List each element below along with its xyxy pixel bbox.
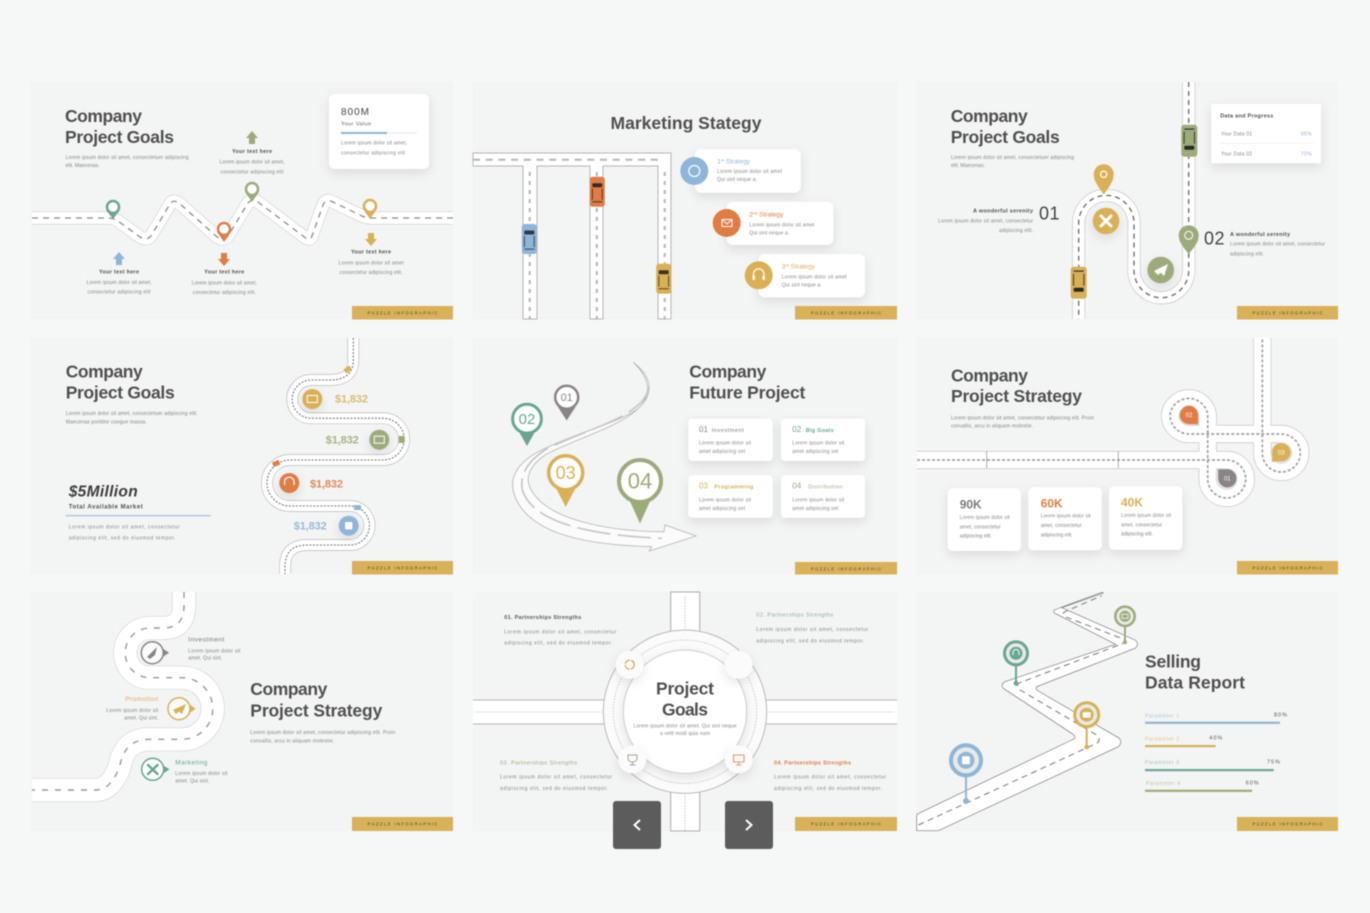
text block 03	[500, 760, 612, 792]
mini car: olive	[399, 436, 405, 443]
bar chart: Parameter 4	[1146, 781, 1180, 787]
intro text	[951, 415, 1094, 430]
title	[689, 362, 805, 403]
text block 03: 03. Partnerships Strengths	[500, 760, 577, 766]
title: Future Project	[689, 383, 805, 403]
pin: olive	[1115, 607, 1135, 644]
text block 03: Lorem ipsum dolor sit amet, consectetur	[500, 775, 612, 781]
pin: olive	[245, 183, 259, 202]
data card: Your Data 02	[1221, 151, 1252, 157]
callout: gold down arrow: Lorem ipsum dolor sit amet	[338, 260, 404, 266]
item 01	[938, 203, 1060, 234]
title: Selling	[1145, 652, 1201, 672]
intro text: Lorem ipsum dolor sit amet, consectetur adipiscing elit. Proin	[250, 730, 396, 736]
intro text: convallis, arcu in aliquam molestie.	[250, 739, 334, 745]
card 02: amet adipiscing set	[792, 449, 839, 455]
intro text	[250, 730, 396, 745]
bar chart	[1145, 713, 1287, 792]
strategy card 2: nd	[753, 210, 757, 215]
strategy card 3: Lorem ipsum dolor sit amet	[782, 275, 847, 281]
node: monitor icon	[725, 745, 753, 773]
item: investment: Lorem ipsum dolor sit	[188, 648, 241, 654]
title: Company	[250, 679, 328, 699]
strategy card 1: 1	[717, 158, 721, 165]
stat card 60K	[1028, 487, 1102, 550]
text block 04: adipiscing elit, sed do eiusmod tempor.	[774, 786, 882, 792]
pin 04	[619, 460, 661, 524]
title: Company	[65, 106, 142, 126]
panel: company future project	[473, 338, 897, 574]
item 01: 01	[1039, 203, 1060, 223]
item: promotion: amet. Qui sint.	[124, 716, 158, 722]
title: Company	[689, 362, 767, 382]
item 02: 02	[1204, 228, 1224, 248]
button: next	[725, 801, 773, 849]
card 04: 04	[792, 482, 802, 491]
panel: company project goals serpentine road	[31, 338, 453, 574]
footer tag	[352, 306, 453, 320]
title	[656, 678, 714, 719]
card 03: Lorem ipsum dolor sit	[699, 497, 752, 503]
title: Goals	[662, 699, 708, 719]
value row: blue	[294, 516, 359, 536]
stat card 60K: 60K	[1041, 496, 1063, 510]
panel: company project goals zigzag road	[31, 82, 453, 320]
arrow road	[513, 362, 696, 551]
card 04: Lorem ipsum dolor sit	[792, 497, 845, 503]
strategy card 1: Strategy	[724, 158, 751, 165]
footer tag: PUZZLE INFOGRAPHIC	[1252, 822, 1322, 826]
panel: company project strategy looping road	[917, 338, 1338, 574]
footer tag: PUZZLE INFOGRAPHIC	[811, 310, 881, 316]
pin 01: 01	[561, 392, 573, 404]
pin: teal	[106, 201, 120, 219]
callout: olive up arrow: Lorem ipsum dolor sit amet,	[220, 160, 284, 166]
footer tag: PUZZLE INFOGRAPHIC	[1252, 310, 1322, 316]
intro text: Lorem ipsum dolor sit amet, consectetuer adipiscing elit.	[66, 411, 198, 417]
strategy card 3: Strategy	[789, 263, 816, 270]
pin: teal	[1004, 642, 1028, 686]
item: marketing	[175, 759, 228, 785]
value row: blue: $1,832	[294, 520, 327, 532]
title: Project Strategy	[951, 386, 1082, 406]
stat card 90K: 90K	[960, 497, 982, 511]
value card: Lorem ipsum dolor sit amet,	[341, 141, 407, 147]
title	[951, 366, 1082, 406]
bar chart: Parameter 3	[1145, 760, 1179, 766]
data card: 95%	[1301, 132, 1312, 138]
card 01: Investment	[712, 428, 744, 434]
strategy card 2: Lorem ipsum dolor sit amet	[749, 223, 815, 229]
footer tag	[352, 561, 453, 574]
intro text: Maecenas porttitor congue massa.	[66, 419, 147, 425]
strategy card 1	[680, 149, 801, 193]
card 03: amet adipiscing set	[699, 506, 746, 512]
zigzag perspective road	[917, 592, 1137, 831]
pin: orange	[217, 223, 231, 242]
footer tag	[795, 817, 897, 831]
callout: blue up arrow: consectetur adipiscing elit	[88, 290, 151, 296]
car: gold	[1071, 267, 1087, 299]
footer tag: PUZZLE INFOGRAPHIC	[368, 566, 438, 570]
node: blank	[725, 651, 753, 679]
text block 04: Lorem ipsum dolor sit amet, consectetur	[774, 775, 886, 781]
item 02	[1204, 228, 1325, 257]
callout: gold down arrow	[338, 233, 404, 276]
marker 03	[1272, 443, 1291, 462]
text block 03: adipiscing elit, sed do eiusmod tempor.	[500, 786, 608, 792]
panel: selling data report	[917, 592, 1338, 831]
text block 01: adipiscing elit, sed do eiusmod tempor.	[504, 641, 612, 647]
value row: orange: $1,832	[310, 478, 343, 490]
item 01: adipiscing elit.	[999, 228, 1033, 234]
title: Data Report	[1145, 673, 1245, 693]
card 03	[688, 475, 773, 518]
callout: blue up arrow: Lorem ipsum dolor sit amet,	[86, 280, 152, 286]
title	[250, 679, 383, 720]
footer tag	[1237, 561, 1338, 574]
icon: promotion plane	[168, 698, 196, 720]
stat card 90K: amet, consectetur	[960, 524, 1001, 530]
item: marketing: Lorem ipsum dolor sit	[175, 771, 228, 777]
marker 02	[1180, 406, 1198, 424]
marker 01: 01	[1224, 476, 1231, 482]
S road	[32, 592, 213, 790]
node: gold cycle icon	[616, 651, 644, 679]
intro text	[66, 411, 198, 425]
intro text	[66, 155, 189, 169]
pin 01	[555, 386, 578, 420]
stat card 40K: 40K	[1121, 496, 1143, 510]
market stat: adipiscing elit, sed do eiusmod tempor.	[69, 535, 176, 541]
value row: olive	[326, 430, 389, 450]
callout: gold down arrow: Your text here	[351, 250, 391, 256]
card 01	[688, 419, 773, 461]
strategy card 1: st	[721, 157, 725, 162]
text block 01: 01. Partnerships Strengths	[504, 615, 581, 621]
card 02: Lorem ipsum dolor sit	[792, 441, 845, 447]
strategy card 2	[713, 202, 833, 245]
item: investment: amet. Qui sint.	[188, 656, 222, 662]
card 03: Programming	[714, 485, 753, 491]
footer tag	[352, 817, 453, 831]
callout: olive up arrow	[220, 131, 284, 175]
title: Company	[951, 366, 1028, 386]
marker 01	[1218, 469, 1237, 488]
data card: Data and Progress	[1220, 114, 1273, 120]
panel: project goals roundabout	[473, 592, 897, 831]
node: trophy icon	[618, 745, 646, 773]
item: promotion	[106, 696, 159, 722]
strategy card 3: 3	[782, 263, 785, 270]
card 01: Lorem ipsum dolor sit	[699, 441, 752, 447]
stat card 60K: adipiscing elit.	[1041, 532, 1073, 538]
center text: Lorem ipsum dolor sit amet. Qui sint neque	[634, 724, 737, 730]
strategy card 2: Qui sint neque a.	[749, 230, 789, 236]
pin: gold	[1075, 703, 1099, 749]
icon: marketing tools	[142, 758, 170, 780]
strategy card 2: Strategy	[757, 211, 784, 218]
item 02: A wonderful serenity	[1230, 232, 1291, 238]
strategy card 2: 2	[749, 211, 753, 218]
intro text: elit. Maecenas.	[951, 163, 985, 169]
bar chart: 40%	[1209, 736, 1222, 742]
callout: gold down arrow: consectetur adipiscing elit.	[340, 270, 402, 276]
card 04: amet adipiscing set	[792, 506, 839, 512]
text block 02: 02. Partnerships Strengths	[756, 613, 834, 619]
strategy card 3: rd	[785, 262, 789, 267]
market stat: $5Million	[68, 484, 138, 501]
card 01: amet adipiscing set	[699, 449, 746, 455]
title	[1145, 652, 1245, 693]
item 01: A wonderful serenity	[973, 208, 1034, 214]
callout: orange down arrow	[192, 253, 257, 296]
text block 04	[774, 760, 886, 792]
card 01: 01	[699, 425, 708, 434]
card 03: 03	[699, 482, 708, 491]
callout: blue up arrow	[86, 252, 152, 296]
text block 01	[504, 615, 617, 647]
intro text: Lorem ipsum dolor sit amet, consectetuer adipiscing	[66, 155, 189, 161]
intro text: Lorem ipsum dolor sit amet, consectetur adipiscing elit. Proin	[951, 415, 1094, 421]
footer tag: PUZZLE INFOGRAPHIC	[368, 310, 438, 316]
marker 02: 02	[1186, 413, 1193, 419]
car: blue	[522, 224, 537, 254]
callout: orange down arrow: Your text here	[204, 270, 244, 276]
bar chart: 80%	[1274, 713, 1287, 719]
card 02: 02	[792, 425, 802, 434]
callout: olive up arrow: consectetur adipiscing elit	[220, 169, 284, 175]
panel: company project goals winding road	[917, 82, 1338, 320]
card 02	[781, 419, 865, 461]
footer tag: PUZZLE INFOGRAPHIC	[368, 822, 438, 826]
button: previous	[613, 801, 661, 849]
callout: orange down arrow: consectetur adipiscing elit.	[193, 290, 256, 296]
footer tag: PUZZLE INFOGRAPHIC	[811, 566, 881, 572]
stat card 60K: amet, consectetur	[1041, 523, 1082, 529]
car: gold	[656, 264, 671, 294]
title: Marketing Stategy	[610, 113, 762, 133]
icon: investment rocket	[141, 642, 169, 664]
callout: blue up arrow: Your text here	[99, 269, 139, 275]
stat card 90K	[948, 488, 1021, 551]
pin 02	[513, 404, 541, 446]
center text	[634, 724, 737, 737]
mini car: orange	[272, 460, 280, 467]
bar chart: Parameter 1	[1145, 713, 1179, 719]
item: investment	[188, 637, 241, 662]
callout: orange down arrow: Lorem ipsum dolor sit amet,	[192, 280, 257, 286]
data card	[1211, 104, 1321, 163]
market stat: Lorem ipsum dolor sit amet, consectetur	[69, 524, 180, 530]
stat card 40K	[1109, 486, 1182, 550]
value card	[329, 94, 429, 169]
item: marketing: amet. Qui sint.	[175, 779, 209, 785]
footer tag	[1237, 817, 1338, 831]
text block 02: Lorem ipsum dolor sit amet, consectetur	[756, 627, 869, 633]
strategy card 3: Qui sint neque a.	[782, 282, 822, 288]
text block 02	[756, 613, 869, 644]
intro text: elit. Maecenas.	[66, 163, 100, 169]
panel: company project strategy S road	[31, 592, 453, 831]
marker 03: 03	[1278, 450, 1285, 456]
stat card 90K: adipiscing elit.	[960, 534, 992, 540]
title: Project Strategy	[250, 700, 383, 720]
bar chart: Parameter 2	[1145, 736, 1179, 742]
street grid	[473, 153, 671, 319]
data card: 70%	[1301, 151, 1312, 157]
data card: Your Data 01	[1221, 132, 1252, 138]
value row: gold	[302, 389, 368, 409]
item: marketing: Marketing	[175, 759, 208, 766]
text block 02: adipiscing elit, sed do eiusmod tempor.	[756, 638, 864, 644]
title: Project Goals	[66, 382, 175, 402]
title	[65, 106, 174, 147]
roundabout roads	[473, 592, 897, 831]
car: orange	[590, 177, 605, 207]
value row: gold: $1,832	[335, 394, 368, 406]
item: promotion: Lorem ipsum dolor sit	[106, 708, 159, 714]
pin: blue	[951, 745, 981, 804]
footer tag	[795, 562, 897, 574]
title	[66, 362, 175, 402]
pin 03	[549, 456, 583, 507]
pin: olive	[1179, 225, 1199, 254]
center text: a velit modi quia nam	[660, 731, 710, 737]
stat card 90K: Lorem ipsum dolor sit	[960, 515, 1010, 521]
item 02: adipiscing elit.	[1230, 251, 1264, 257]
stat card 60K: Lorem ipsum dolor sit	[1041, 514, 1091, 520]
pin: gold	[1094, 164, 1114, 194]
footer tag: PUZZLE INFOGRAPHIC	[1252, 566, 1322, 570]
title	[951, 106, 1060, 147]
card 04	[781, 475, 865, 518]
item 02: Lorem ipsum dolor sit amet, consectetur	[1230, 242, 1325, 248]
mini car: gold	[343, 366, 352, 374]
footer tag	[1237, 306, 1338, 320]
intro text	[951, 155, 1074, 169]
value row: olive: $1,832	[326, 435, 359, 447]
intro text: convallis, arcu in aliquam molestie.	[951, 424, 1033, 430]
strategy card 1: Qui sint neque a.	[717, 177, 757, 183]
stat card 40K: adipiscing elit.	[1121, 532, 1153, 538]
value card: Your Value	[341, 122, 371, 128]
market stat: Total Available Market	[69, 504, 143, 510]
item: promotion: Promotion	[125, 696, 159, 703]
footer tag: PUZZLE INFOGRAPHIC	[811, 822, 881, 826]
bar chart: 60%	[1246, 781, 1259, 787]
footer tag	[795, 306, 897, 320]
title: Project Goals	[951, 127, 1060, 147]
title: Project Goals	[65, 127, 174, 147]
stat card 40K: amet, consectetur	[1121, 522, 1162, 528]
value card: 800M	[341, 107, 369, 118]
pin: gold	[363, 200, 377, 219]
panel: marketing strategy	[473, 82, 897, 320]
card 04: Distribution	[808, 485, 842, 491]
market stat	[66, 484, 211, 541]
intro text: Lorem ipsum dolor sit amet, consectetuer adipiscing	[951, 155, 1074, 161]
text block 01: Lorem ipsum dolor sit amet, consectetur	[504, 629, 617, 635]
icon: gold tools	[1093, 208, 1119, 234]
pin 03: 03	[556, 463, 576, 483]
winding road	[1079, 82, 1189, 319]
car: olive	[1181, 125, 1197, 157]
strategy card 1: Lorem ipsum dolor sit amet	[717, 169, 783, 175]
item: investment: Investment	[188, 637, 224, 644]
item 01: Lorem ipsum dolor sit amet, consectetur	[938, 218, 1033, 224]
looping road	[917, 338, 1300, 498]
title: Project	[656, 678, 714, 698]
bar chart: 75%	[1267, 759, 1280, 765]
card 02: Big Goals	[806, 428, 834, 434]
value row: orange	[279, 473, 343, 493]
stat card 40K: Lorem ipsum dolor sit	[1121, 513, 1172, 519]
pin 02: 02	[519, 411, 535, 428]
title: Company	[66, 362, 143, 382]
title: Company	[951, 106, 1028, 126]
pin 04: 04	[628, 469, 652, 494]
text block 04: 04. Partnerships Strengths	[774, 760, 851, 766]
callout: olive up arrow: Your text here	[232, 149, 272, 155]
zigzag road	[32, 200, 453, 239]
strategy card 3	[745, 254, 865, 297]
serpentine road	[267, 338, 404, 574]
icon: olive paper plane	[1147, 257, 1174, 283]
value card: consectetur adipiscing elit	[341, 150, 406, 156]
mini car: blue	[354, 505, 361, 510]
